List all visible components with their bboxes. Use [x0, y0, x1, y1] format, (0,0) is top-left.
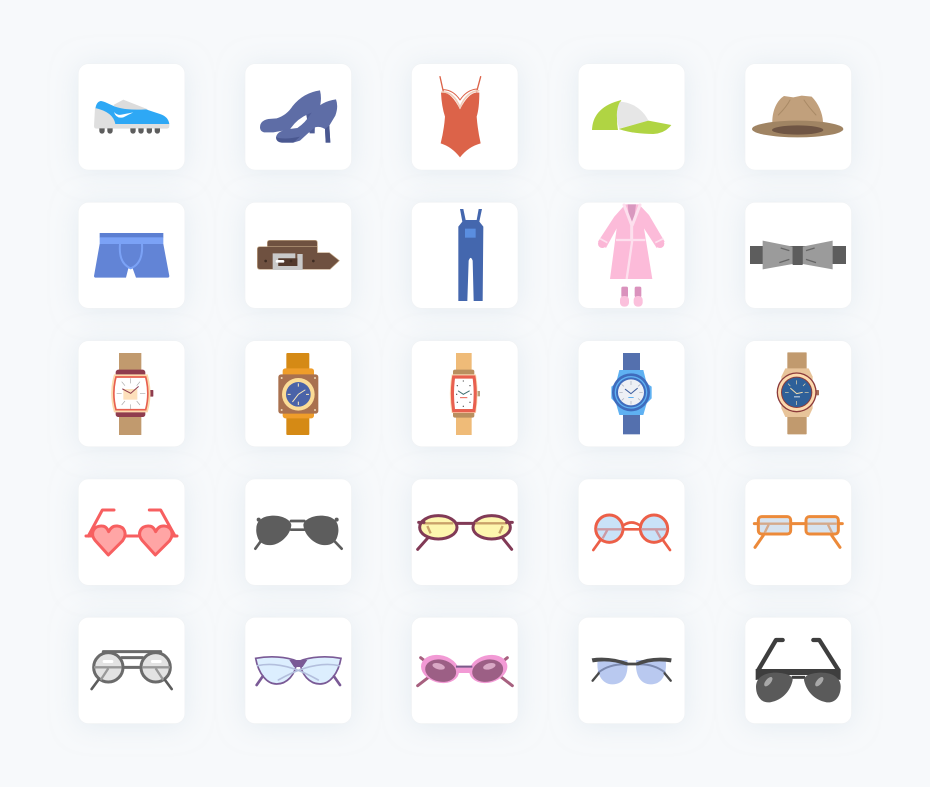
icon: leather belt	[257, 240, 339, 270]
icon: football boot	[94, 100, 169, 134]
icon: fedora hat	[752, 96, 843, 137]
icon: boxer shorts	[94, 233, 169, 278]
icon: bow tie	[750, 241, 846, 269]
icon: pink sunglasses	[418, 651, 512, 687]
icon: dark aviator sunglasses	[255, 516, 342, 549]
icon: baseball cap	[592, 100, 671, 134]
icon: heart sunglasses	[86, 510, 177, 555]
icon: blue sports watch	[611, 353, 652, 434]
icon: tan square watch	[111, 353, 153, 435]
icon: round red glasses	[593, 515, 670, 550]
icon: overalls	[458, 209, 483, 301]
icon: high heels	[260, 90, 337, 143]
icon: cat eye glasses	[256, 657, 341, 685]
icon: blue dial gold watch	[777, 352, 819, 434]
icon: orange square dial watch	[278, 353, 318, 435]
icon: black aviator sunglasses	[756, 640, 841, 702]
icon: half frame glasses	[592, 658, 672, 684]
icon: rectangular orange glasses	[754, 517, 842, 547]
panel: white cards	[78, 64, 852, 724]
icon: grey double bridge glasses	[92, 652, 172, 689]
icon: yellow oval glasses	[418, 516, 512, 549]
icon: swimsuit	[440, 77, 481, 157]
icon: pink bathrobe and slippers	[598, 204, 665, 307]
icon: tall red watch	[450, 353, 480, 435]
